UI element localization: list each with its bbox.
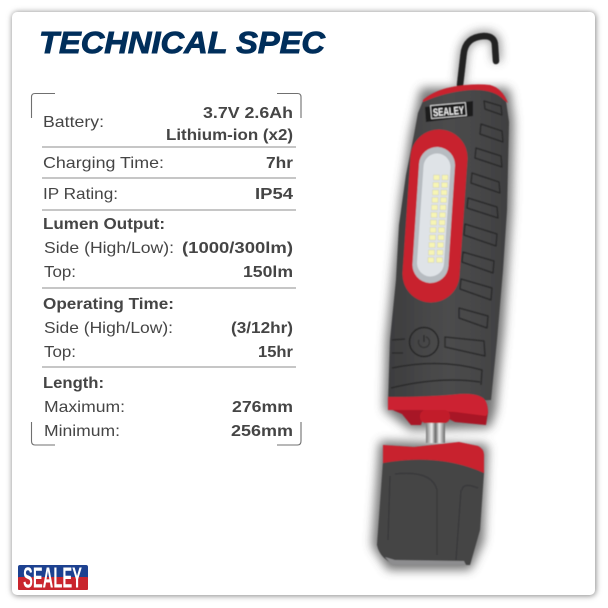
chrome swivel pin	[426, 420, 445, 443]
row: length: Minimum:	[44, 423, 120, 440]
icon: hanging hook	[460, 36, 496, 85]
row: operating time: 15hr	[258, 344, 293, 361]
LED array	[428, 175, 448, 262]
row: lumen output: 150lm	[243, 264, 293, 281]
row: length: 256mm	[231, 423, 293, 440]
row: charging time: 7hr	[266, 155, 293, 172]
row: IP rating: IP Rating:	[43, 186, 118, 203]
row: lumen output: Lumen Output:	[43, 216, 165, 233]
Sealey logo: SEALEY	[23, 562, 82, 594]
base foot plate	[385, 557, 466, 565]
row: length	[43, 375, 293, 440]
logo plate: SEALEY	[433, 105, 465, 119]
row: operating time: Operating Time:	[43, 296, 174, 313]
light body	[388, 87, 509, 405]
row: battery: Lithium-ion (x2)	[166, 127, 293, 144]
silver bezel	[430, 165, 437, 265]
row: lumen output	[43, 216, 293, 281]
red base cap	[383, 442, 484, 473]
icon: power button	[410, 328, 438, 356]
side grips	[391, 101, 503, 388]
row: length: Length:	[43, 375, 104, 392]
row: operating time: (3/12hr)	[231, 320, 293, 337]
table corner brackets	[32, 94, 301, 445]
logo plate	[425, 101, 473, 122]
row: length: Maximum:	[44, 399, 125, 416]
row: lumen output: Side (High/Low):	[44, 240, 174, 257]
red swivel collar	[420, 410, 450, 423]
row: operating time	[43, 296, 293, 361]
red lower collar	[388, 394, 488, 416]
row: charging time: Charging Time:	[43, 155, 164, 172]
row: length: 276mm	[232, 399, 293, 416]
row: operating time: Top:	[44, 344, 76, 361]
lens	[430, 167, 437, 263]
base contours	[388, 473, 478, 560]
row: charging time	[43, 155, 293, 172]
specification table	[32, 94, 301, 445]
row: IP rating	[43, 186, 293, 203]
row: battery	[43, 105, 293, 144]
row: lumen output: (1000/300lm)	[182, 240, 293, 257]
red top cap	[423, 84, 508, 103]
red lens surround	[431, 158, 439, 274]
row: lumen output: Top:	[44, 264, 76, 281]
battery base	[377, 459, 484, 565]
title: TECHNICAL SPEC	[39, 25, 326, 60]
Sealey logo	[18, 562, 88, 594]
row: IP rating: IP54	[255, 186, 293, 203]
soft shadow	[376, 35, 510, 566]
row: battery: Battery:	[43, 114, 104, 131]
row: battery: 3.7V 2.6Ah	[203, 105, 293, 122]
row: operating time: Side (High/Low):	[44, 320, 173, 337]
work light product illustration	[376, 35, 510, 566]
red collar underside	[388, 408, 488, 425]
row dividers	[42, 147, 296, 367]
